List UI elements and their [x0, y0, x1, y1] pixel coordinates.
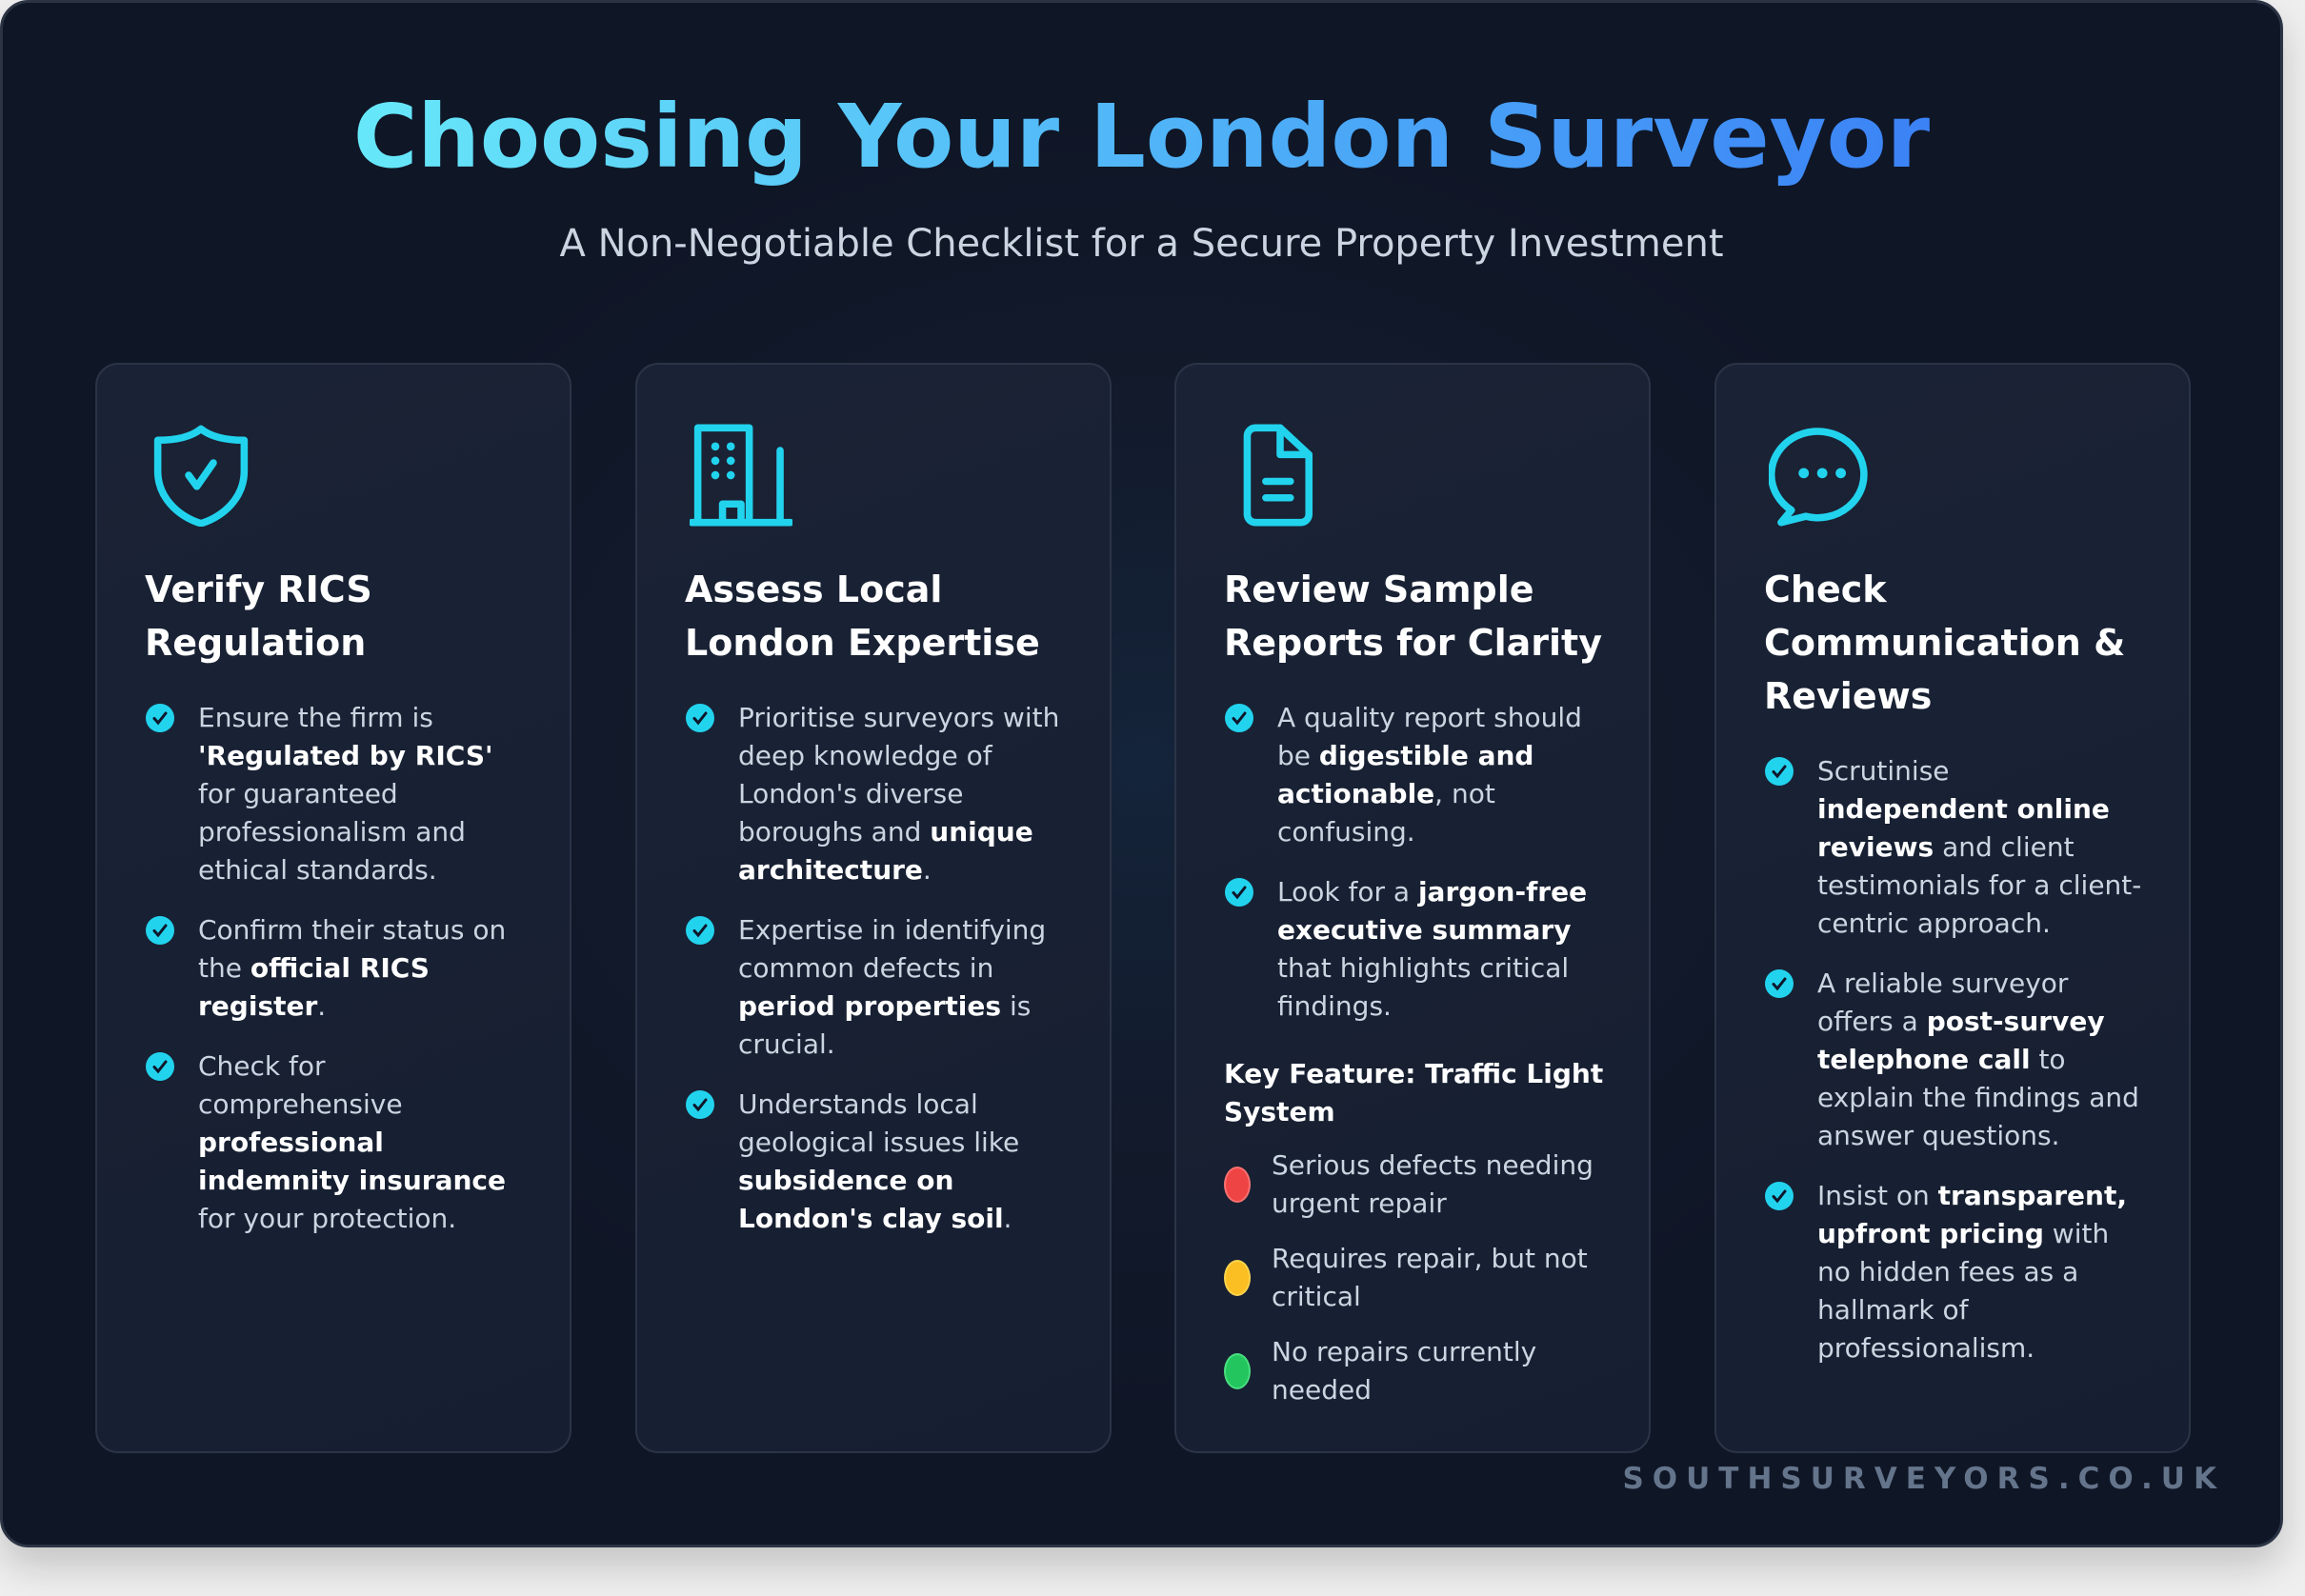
bullet list: Expertise in identifying common defects in period properties is crucial.	[738, 914, 1046, 1060]
traffic light: red: Serious defects needing urgent repair	[1272, 1149, 1593, 1219]
bullet list: Check for comprehensive professional indemnity insurance for your protection.	[198, 1050, 506, 1234]
bullet list: Ensure the firm is 'Regulated by RICS' for guaranteed professionalism and ethical standards.	[198, 702, 493, 886]
heading	[685, 569, 1040, 664]
bullet list: Prioritise surveyors with deep knowledge of London's diverse boroughs and unique architecture.	[738, 702, 1059, 886]
traffic light: amber: Requires repair, but not critical	[1272, 1243, 1588, 1312]
heading: Reports for Clarity	[1224, 622, 1602, 664]
subtitle: A Non-Negotiable Checklist for a Secure Property Investment	[559, 222, 1724, 266]
heading: Communication &	[1764, 622, 2125, 664]
heading	[145, 569, 372, 664]
traffic light: green: No repairs currently needed	[1272, 1336, 1536, 1406]
icon: chat bubble	[1769, 428, 1868, 526]
panel: local expertise	[635, 363, 1112, 1453]
panel: verify RICS	[95, 363, 571, 1453]
bullet list: Scrutinise independent online reviews and client testimonials for a client-centric approach.	[1817, 755, 2141, 939]
panel: sample reports	[1174, 363, 1651, 1453]
bullet list: A quality report should be digestible and actionable, not confusing.	[1277, 702, 1582, 848]
heading	[1764, 569, 2125, 717]
bullet list: Confirm their status on the official RICS register.	[198, 914, 506, 1022]
footer: website: SOUTHSURVEYORS.CO.UK	[1622, 1462, 2225, 1496]
bullet list	[1225, 702, 1587, 1022]
heading: Verify RICS	[145, 569, 372, 610]
icon: shield	[154, 425, 248, 527]
icon: building	[690, 425, 792, 526]
heading	[1224, 569, 1602, 664]
heading: Regulation	[145, 622, 366, 664]
heading: Review Sample	[1224, 569, 1534, 610]
heading: Assess Local	[685, 569, 942, 610]
bullet list: Understands local geological issues like subsidence on London's clay soil.	[738, 1088, 1019, 1234]
heading: Reviews	[1764, 675, 1932, 717]
heading: London Expertise	[685, 622, 1040, 664]
bullet list: Look for a jargon-free executive summary that highlights critical findings.	[1277, 876, 1587, 1022]
heading: Check	[1764, 569, 1887, 610]
icon: document	[1244, 425, 1313, 526]
bullet list	[686, 702, 1059, 1234]
key feature heading: Key Feature: Traffic Light System	[1224, 1058, 1603, 1127]
title: Choosing Your London Surveyor	[353, 86, 1930, 188]
bullet list	[1765, 755, 2141, 1364]
bullet list: A reliable surveyor offers a post-survey telephone call to explain the findings and answer questions.	[1817, 968, 2139, 1151]
panel: communication	[1714, 363, 2191, 1453]
bullet list: Insist on transparent, upfront pricing with no hidden fees as a hallmark of professionalism.	[1817, 1180, 2127, 1364]
bullet list	[146, 702, 506, 1234]
